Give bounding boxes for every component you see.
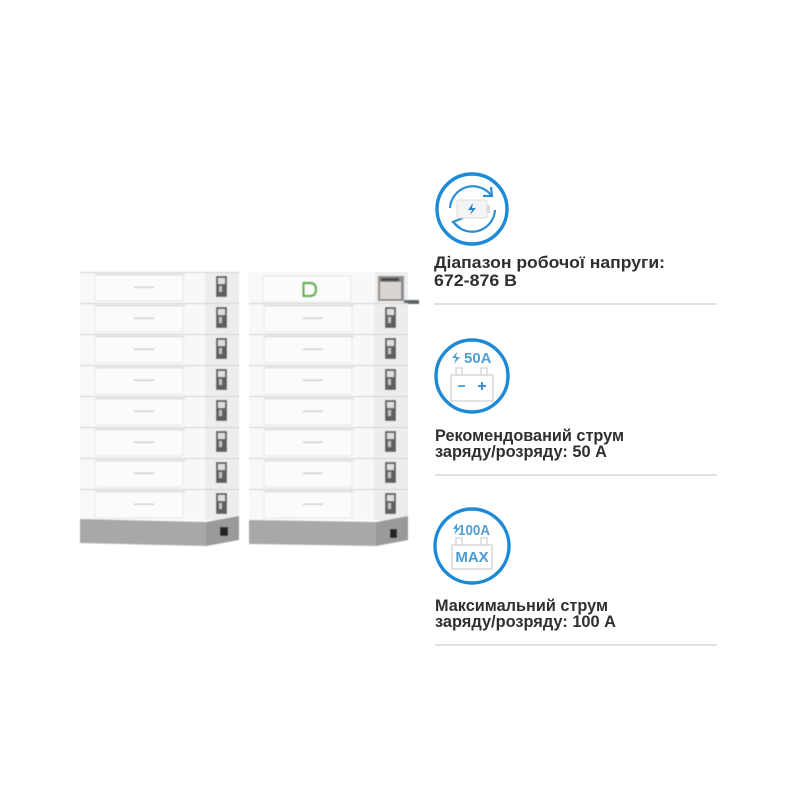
cable xyxy=(404,300,419,304)
icon: battery 50A: 50A xyxy=(464,350,492,367)
base: right xyxy=(249,516,408,546)
logo xyxy=(304,283,316,296)
heading: maximum current: Максимальний струм xyxy=(435,596,608,615)
spec 3: maximum current xyxy=(435,509,717,645)
icon: battery 100A max: MAX xyxy=(455,549,489,566)
icon: battery 100A max: 100A xyxy=(458,522,490,539)
spec 1: voltage range xyxy=(434,174,717,304)
icon: battery with cycle arrows xyxy=(437,174,507,244)
top module with logo and port xyxy=(248,272,419,304)
battery stack: right xyxy=(248,272,419,546)
icon: battery 50A xyxy=(436,340,508,412)
icon: battery 100A max xyxy=(435,509,509,583)
value: recommended current: заряду/розряду: 50 А xyxy=(435,442,607,461)
port panel xyxy=(378,276,404,301)
heading: voltage range: Діапазон робочої напруги: xyxy=(434,253,665,272)
heading: recommended current: Рекомендований струм xyxy=(435,426,624,445)
base: left xyxy=(80,516,239,546)
spec 2: recommended current xyxy=(435,340,717,475)
battery stack: left xyxy=(80,272,239,546)
value: maximum current: заряду/розряду: 100 А xyxy=(435,612,616,631)
value: voltage range: 672-876 В xyxy=(434,271,517,290)
